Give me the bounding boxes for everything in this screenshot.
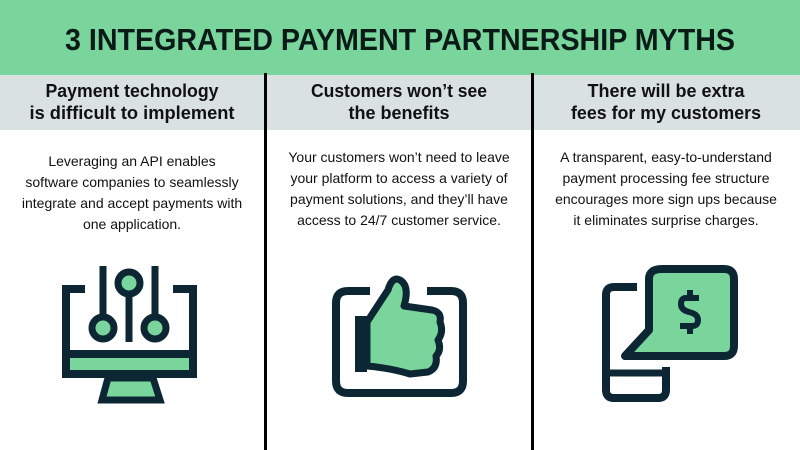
text 2: Your customers won’t need to leave — [288, 149, 510, 165]
icon: monitor circuit — [66, 266, 193, 400]
text 1: software companies to seamlessly — [25, 174, 239, 190]
text 3: encourages more sign ups because — [555, 191, 777, 207]
heading 3 — [571, 81, 761, 123]
text 3 — [555, 149, 777, 228]
panel: myth 2 — [288, 81, 510, 393]
text 2: your platform to access a variety of — [290, 170, 508, 186]
text 2: access to 24/7 customer service. — [297, 212, 501, 228]
panel: myth 3 — [555, 81, 777, 398]
text 1 — [22, 153, 242, 232]
text 3: payment processing fee structure — [562, 170, 770, 186]
heading 3: fees for my customers — [571, 103, 761, 123]
heading band — [0, 75, 800, 130]
text 1: integrate and accept payments with — [22, 195, 242, 211]
heading 2: Customers won’t see — [311, 81, 487, 101]
title banner — [0, 0, 800, 75]
text 2: payment solutions, and they’ll have — [290, 191, 508, 207]
icon: phone with dollar bubble — [606, 269, 734, 398]
text 1: one application. — [83, 216, 181, 232]
text 3: A transparent, easy-to-understand — [560, 149, 772, 165]
heading 2 — [311, 81, 487, 123]
title: 3 INTEGRATED PAYMENT PARTNERSHIP MYTHS — [65, 22, 735, 57]
heading 1: Payment technology — [46, 81, 218, 101]
heading 1: is difficult to implement — [30, 103, 234, 123]
panel: myth 1 — [22, 81, 242, 400]
text 3: it eliminates surprise charges. — [573, 212, 759, 228]
icon: thumbs up — [336, 279, 463, 393]
heading 2: the benefits — [348, 103, 450, 123]
text 1: Leveraging an API enables — [48, 153, 216, 169]
heading 3: There will be extra — [587, 81, 746, 101]
heading 1 — [30, 81, 234, 123]
text 2 — [288, 149, 510, 228]
